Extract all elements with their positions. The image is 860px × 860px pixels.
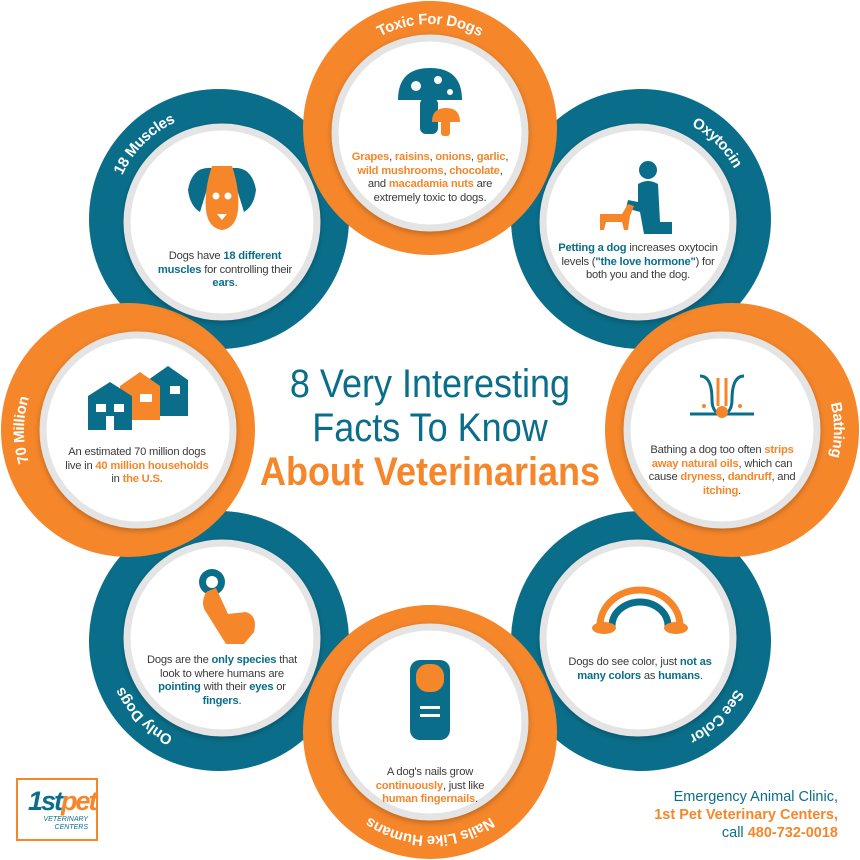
outer disc: See Color <box>511 511 771 771</box>
icon: houses <box>88 366 188 430</box>
outer disc: 18 Muscles <box>89 89 349 349</box>
title: About Veterinarians <box>260 450 600 494</box>
outer disc: Nails <box>303 605 557 859</box>
contact text <box>654 789 838 841</box>
logo: VETERINARY <box>44 816 88 823</box>
curved labels: Nails Like Humans <box>366 818 495 846</box>
text: nails: A dog's nails grow continuously, just like human fingernails. <box>376 766 484 805</box>
icon: finger nail <box>410 660 450 740</box>
logo <box>16 778 98 841</box>
text: 18 muscles: Dogs have 18 different muscles for controlling their ears. <box>158 250 292 289</box>
logo: 1stpet <box>28 786 96 816</box>
curved labels: Bathing <box>828 402 845 458</box>
icon: hair follicle <box>690 376 754 418</box>
curved labels: 70 Million <box>13 396 29 464</box>
outer disc: Oxytocin <box>511 89 771 349</box>
curved labels: Toxic For Dogs <box>376 14 482 36</box>
icon: pointing hand <box>199 569 255 644</box>
contact text: 1st Pet Veterinary Centers, <box>654 807 838 823</box>
curved labels: 18 Muscles <box>114 116 174 175</box>
title <box>260 362 600 494</box>
icon: rainbow <box>592 590 688 634</box>
outer disc: Toxic <box>303 1 557 255</box>
icon: mushroom <box>398 68 462 136</box>
text: only dogs: Dogs are the only species that look to where humans are pointing with their eyes or fingers. <box>147 654 297 706</box>
text: toxic: Grapes, raisins, onions, garlic, wild mushrooms, chocolate, and macadamia nuts are extremely toxic to dogs. <box>352 151 508 204</box>
text: oxytocin: Petting a dog increases oxytocin levels ("the love hormone") for both you and the dog. <box>558 242 718 281</box>
curved labels: Only Dogs <box>117 688 171 744</box>
title: 8 Very Interesting <box>290 362 570 406</box>
text: 70 million: An estimated 70 million dogs live in 40 million households in the U.S. <box>65 446 209 485</box>
icon: dog face <box>188 166 256 230</box>
logo: CENTERS <box>55 824 88 831</box>
contact text: call 480-732-0018 <box>722 825 838 841</box>
icon: person petting dog <box>600 161 672 234</box>
text: see color: Dogs do see color, just not as many colors as humans. <box>568 656 712 682</box>
contact text: Emergency Animal Clinic, <box>674 789 838 805</box>
outer disc: Bathing <box>605 303 859 557</box>
title: Facts To Know <box>312 406 548 450</box>
curved labels: See Color <box>691 690 744 743</box>
outer disc: Only Dogs <box>89 511 349 771</box>
text: bathing: Bathing a dog too often strips away natural oils, which can cause dryness, dandruff, and itching. <box>649 444 795 496</box>
outer disc: 70 Million <box>1 303 255 557</box>
curved labels: Oxytocin <box>694 118 740 168</box>
